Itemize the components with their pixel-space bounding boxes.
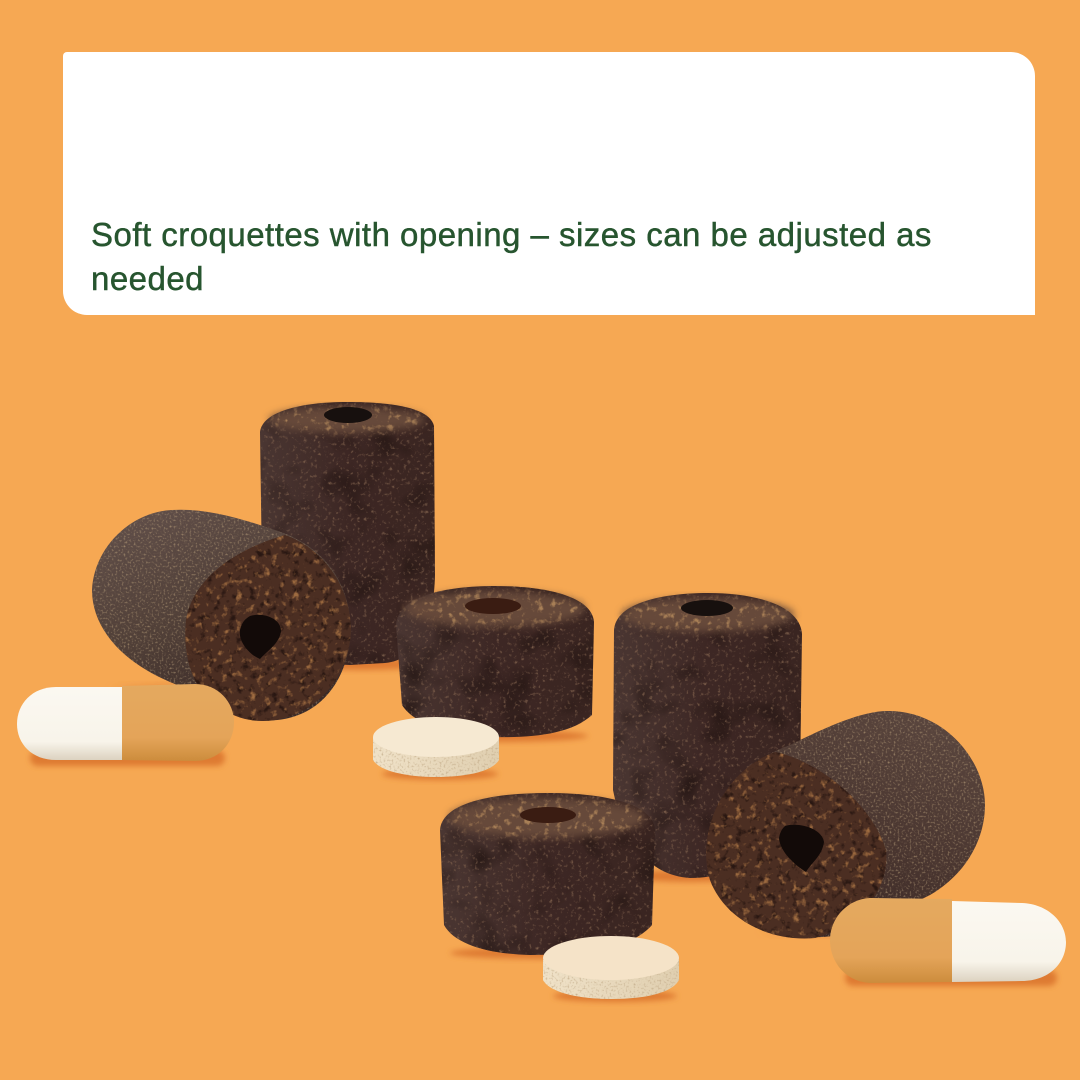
croquette: tall back	[260, 402, 435, 670]
capsule: orange and white, right	[830, 898, 1066, 986]
croquette: short bottom	[440, 793, 655, 959]
tablet: bottom	[543, 936, 679, 1002]
panel: white caption card	[63, 52, 1035, 315]
opening	[681, 600, 733, 616]
top rim with crumbs	[449, 798, 645, 838]
croquette: short center	[396, 586, 594, 742]
croquette: lying left with opening	[92, 510, 351, 721]
tablet: center	[373, 717, 499, 780]
croquette: lying right with opening	[706, 711, 985, 938]
top rim with crumbs	[269, 407, 425, 433]
cut face	[185, 535, 351, 721]
croquette: tall right	[613, 593, 802, 882]
top rim with crumbs	[622, 598, 794, 632]
top rim with crumbs	[405, 591, 585, 627]
capsule: white and orange, left	[17, 684, 234, 766]
opening	[779, 825, 824, 872]
cut face	[706, 752, 886, 938]
opening	[465, 598, 521, 614]
opening	[240, 615, 281, 659]
caption text: Soft croquettes with opening – sizes can be adjusted as needed	[91, 216, 932, 297]
opening	[324, 407, 372, 423]
opening	[520, 807, 576, 823]
